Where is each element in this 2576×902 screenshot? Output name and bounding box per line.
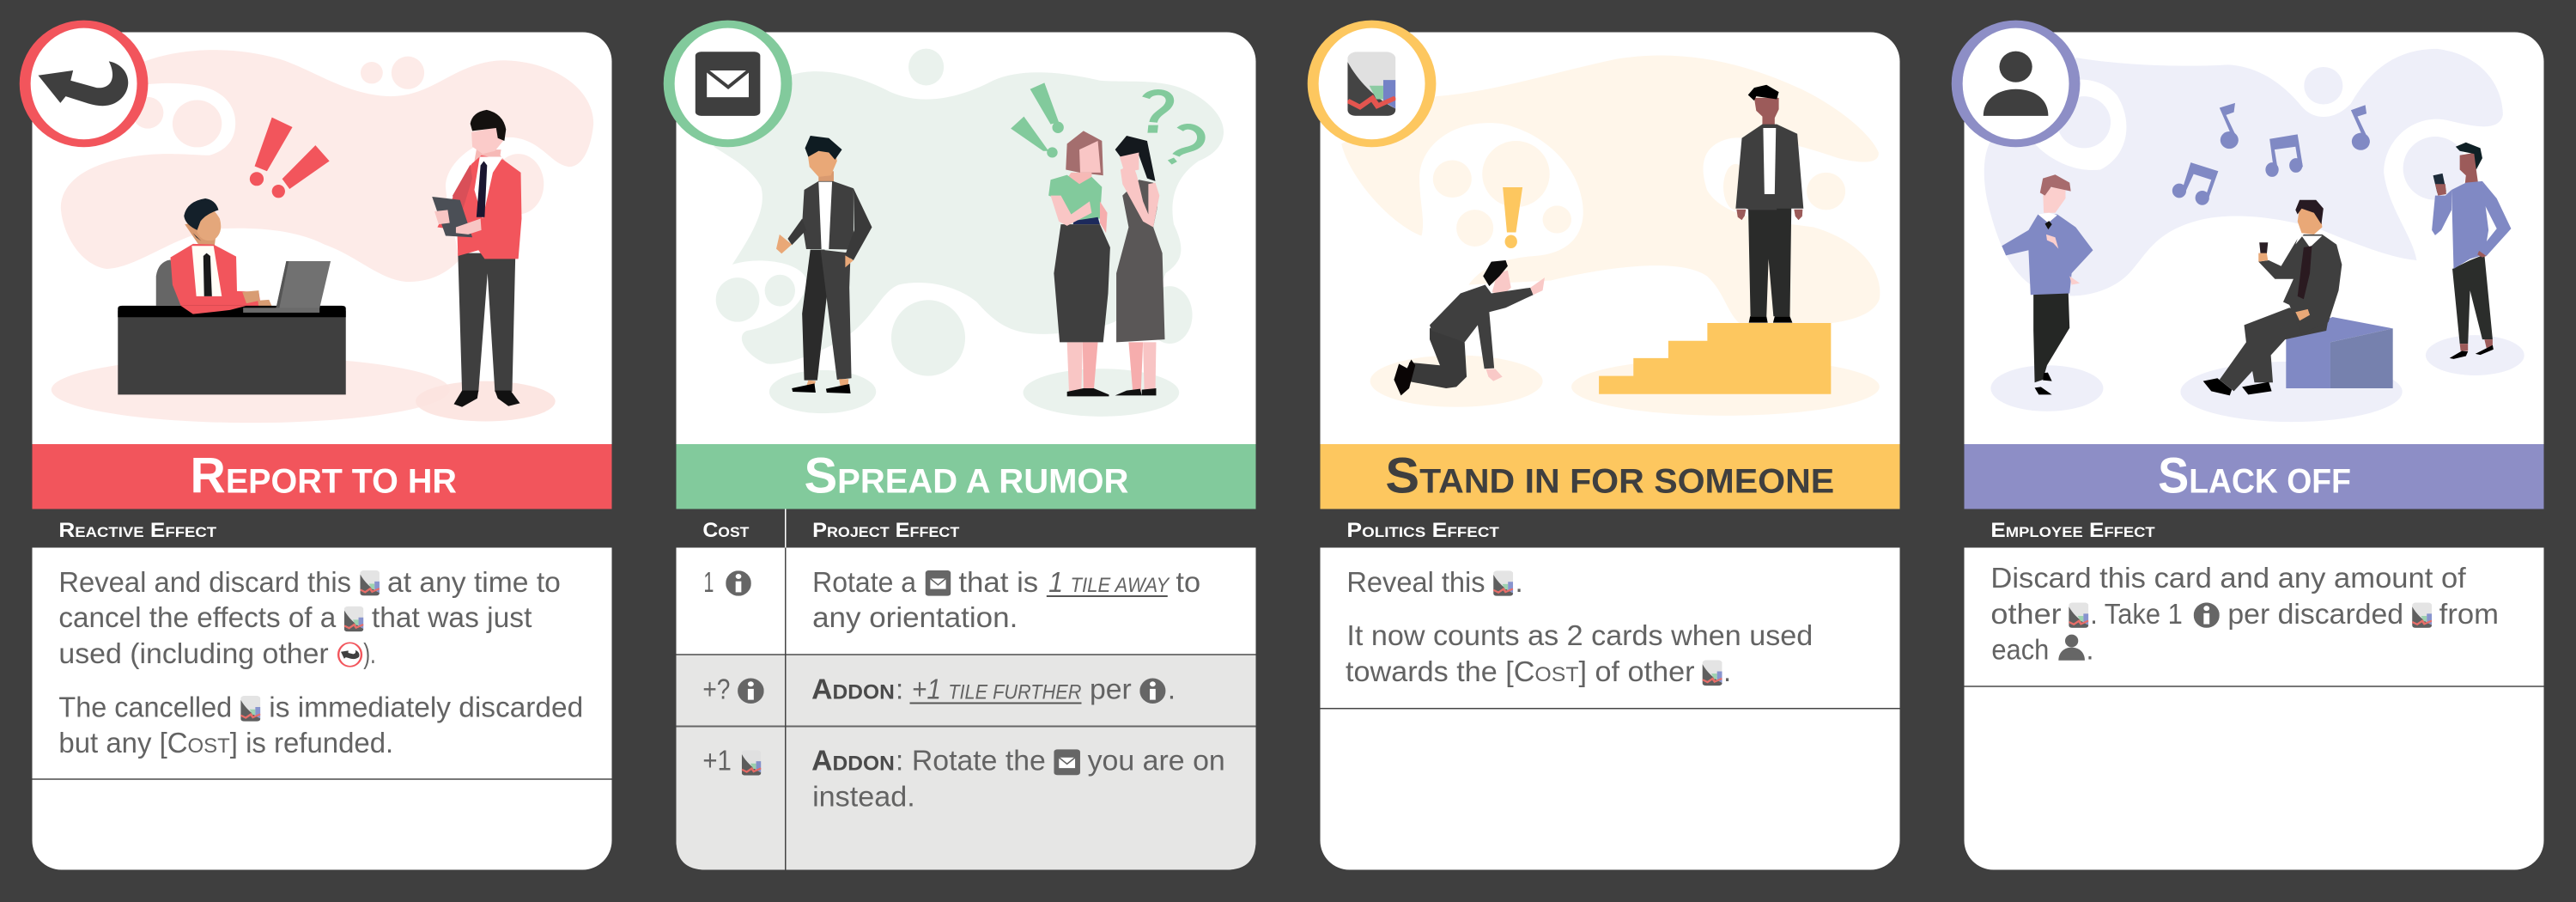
card: stand in for someone bbox=[1313, 24, 1899, 870]
desk with laptop bbox=[118, 261, 346, 394]
stairs bbox=[1599, 323, 1831, 394]
cost header: COST bbox=[702, 519, 750, 542]
illustration: standing on stairs bbox=[1313, 24, 1880, 416]
ring icon: reaction bbox=[25, 24, 143, 143]
row 1: that is bbox=[958, 566, 1038, 598]
row 3: instead. bbox=[812, 780, 915, 813]
ring icon: tile bbox=[669, 24, 787, 143]
effect text: used (including other bbox=[58, 637, 329, 669]
row 1: Rotate a bbox=[812, 566, 917, 598]
effect text: from bbox=[2439, 598, 2499, 630]
row 3: you are on bbox=[1088, 745, 1225, 777]
row 1: 1 TILE AWAY bbox=[1048, 566, 1170, 598]
illustration: people on phones bbox=[1957, 24, 2524, 422]
card base bbox=[1321, 33, 1899, 869]
standing man bbox=[1735, 85, 1803, 323]
title band bbox=[677, 444, 1255, 509]
illustration: gossip bbox=[669, 24, 1224, 417]
effect label: EMPLOYEE EFFECT bbox=[1990, 519, 2155, 542]
woman right bbox=[1115, 136, 1165, 395]
effect text: Discard this card and any amount of bbox=[1990, 562, 2467, 594]
ring icon: card bbox=[1313, 24, 1431, 143]
card: slack off bbox=[1957, 24, 2543, 870]
row 3: Rotate the bbox=[912, 745, 1046, 777]
title: SLACK OFF bbox=[2158, 448, 2351, 503]
divider bbox=[1321, 708, 1899, 710]
row 1: 1 bbox=[703, 566, 714, 598]
effect text: The cancelled bbox=[58, 692, 232, 723]
row 2 bbox=[702, 673, 1176, 705]
title band bbox=[1321, 444, 1899, 509]
inline icons bbox=[2058, 602, 2432, 661]
row 1 bbox=[703, 566, 1200, 633]
illustration: reporting to hr bbox=[25, 24, 593, 423]
ring icon: employee bbox=[1957, 24, 2075, 143]
effect text: . Take 1 bbox=[2090, 598, 2183, 630]
row 2: per bbox=[1090, 673, 1132, 705]
effect text: that was just bbox=[372, 601, 532, 633]
effect text bbox=[1990, 562, 2499, 666]
title band bbox=[33, 444, 611, 509]
card: report to hr bbox=[25, 24, 612, 870]
title: STAND IN FOR SOMEONE bbox=[1385, 448, 1834, 503]
row 2: +? bbox=[702, 673, 730, 705]
man in suit bbox=[776, 136, 872, 393]
title: SPREAD A RUMOR bbox=[804, 448, 1129, 503]
woman left bbox=[1048, 131, 1110, 396]
effect text: . bbox=[1723, 655, 1731, 687]
inline icons bbox=[726, 570, 1165, 776]
effect label: REACTIVE EFFECT bbox=[58, 519, 217, 542]
seated man at desk bbox=[156, 198, 272, 314]
divider bbox=[1965, 686, 2543, 687]
title band bbox=[1965, 444, 2543, 509]
divider bbox=[33, 778, 611, 780]
effect text: . bbox=[1515, 566, 1523, 598]
effect text: each bbox=[1991, 634, 2049, 666]
row 2: : bbox=[896, 673, 903, 705]
card: spread a rumor bbox=[669, 24, 1255, 870]
effect header strip bbox=[1321, 509, 1899, 548]
effect text: per discarded bbox=[2227, 598, 2403, 630]
inline icons bbox=[1493, 570, 1722, 686]
title: REPORT TO HR bbox=[191, 448, 457, 503]
inline icons bbox=[240, 570, 380, 722]
man with phone bbox=[2432, 143, 2511, 359]
effect text: Reveal and discard this bbox=[58, 566, 351, 598]
man checking watch bbox=[2002, 174, 2093, 394]
row 2: +1 TILE FURTHER bbox=[912, 673, 1081, 705]
row 3 bbox=[702, 745, 1225, 813]
row 2: . bbox=[1168, 673, 1176, 705]
exclamation mark bbox=[1503, 187, 1522, 248]
effect text: ). bbox=[363, 637, 376, 669]
cube seat bbox=[2286, 317, 2393, 388]
card base bbox=[33, 33, 611, 869]
effect header strip bbox=[1965, 509, 2543, 548]
standing man with tablet bbox=[432, 110, 521, 407]
effect text: is immediately discarded bbox=[269, 692, 583, 723]
effect text: cancel the effects of a bbox=[58, 601, 337, 633]
music notes bbox=[2172, 103, 2370, 205]
effect text: at any time to bbox=[387, 566, 561, 598]
row 2: ADDON bbox=[811, 673, 895, 705]
effect table bbox=[677, 509, 1255, 869]
project effect header: PROJECT EFFECT bbox=[812, 519, 960, 542]
effect header strip bbox=[33, 509, 611, 548]
effect text bbox=[58, 566, 583, 759]
card base bbox=[677, 33, 1255, 869]
effect label: POLITICS EFFECT bbox=[1346, 519, 1500, 542]
exclamation and question marks bbox=[1011, 82, 1201, 165]
effect text bbox=[1346, 566, 1813, 687]
kneeling man bbox=[1394, 260, 1545, 395]
effect text: . bbox=[2086, 634, 2094, 666]
row 1: to bbox=[1176, 566, 1200, 598]
exclamation marks bbox=[250, 118, 330, 198]
row 1: any orientation. bbox=[812, 601, 1018, 633]
seated man bbox=[2203, 200, 2342, 395]
row 3: : bbox=[896, 745, 903, 777]
effect text: but any [COST] is refunded. bbox=[58, 727, 393, 759]
effect text: towards the [C OST] of other bbox=[1346, 655, 1695, 687]
effect text: other bbox=[1990, 598, 2062, 630]
card base bbox=[1965, 33, 2543, 869]
row 3: ADDON bbox=[811, 745, 895, 777]
effect text: It now counts as 2 cards when used bbox=[1346, 619, 1813, 651]
effect text: Reveal this bbox=[1346, 566, 1485, 598]
row 3: +1 bbox=[702, 745, 732, 777]
